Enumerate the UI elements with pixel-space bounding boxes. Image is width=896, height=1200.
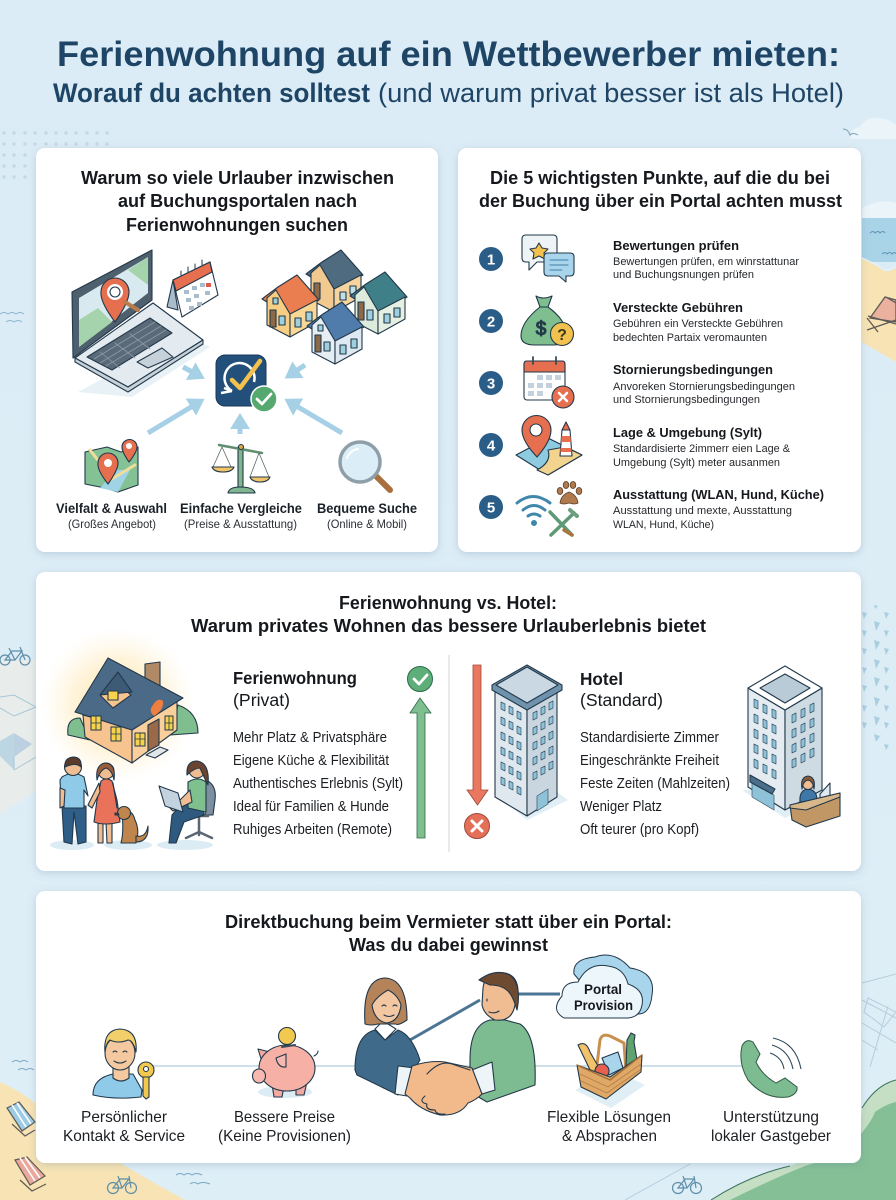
cloud: Portal Provision: [556, 955, 653, 1018]
text: Gebühren: bedechten Partaix veromaunten: [613, 332, 767, 344]
green hill bottom right: [711, 1080, 896, 1200]
icon: laptop with map: [72, 250, 210, 397]
item 4: [479, 416, 791, 475]
dot pattern top left: [2, 131, 109, 179]
icon: fork and knife: [550, 510, 577, 535]
house: orange: [262, 275, 319, 337]
label: Flexible Lösungen: [547, 1109, 671, 1145]
item 3: [479, 357, 795, 408]
Hotel list: Eingeschränkte Freiheit: [580, 753, 719, 769]
icon: money bag: [521, 296, 574, 346]
panel: Ferienwohnung vs. Hotel: [36, 572, 861, 871]
panel heading: [81, 167, 394, 235]
Hotel list: Standardisierte Zimmer: [580, 730, 719, 746]
label: Bequeme Suche: (Online & Mobil): [327, 517, 407, 531]
panel heading: Die 5 wichtigsten Punkte, auf die du bei: [490, 167, 830, 188]
panel heading: auf Buchungsportalen nach: [118, 190, 357, 211]
label: Unterstützung: Unterstützung: [723, 1109, 819, 1126]
label: Einfache Vergleiche: [180, 500, 302, 531]
label: Bequeme Suche: Bequeme Suche: [317, 500, 417, 516]
Hotel list: Weniger Platz: [580, 799, 662, 815]
text: Storno: Stornierungsbedingungen: [613, 362, 773, 377]
woman: [355, 978, 420, 1095]
item 5: [479, 482, 824, 535]
number badge 5: [479, 495, 503, 519]
panel heading: [479, 167, 842, 211]
house: teal: [350, 272, 407, 334]
Ferienwohnung list: Ferienwohnung: [233, 668, 357, 688]
icon: hotel building: [492, 665, 568, 820]
Ferienwohnung list: Mehr Platz & Privatsphäre: [233, 730, 387, 746]
icon: hotel with reception: [742, 666, 840, 827]
cloud: Portal Provision: Portal: [584, 982, 622, 997]
Hotel list: Feste Zeiten (Mahlzeiten): [580, 776, 730, 792]
panel heading: Direktbuchung beim Vermieter statt über ein Portal:: [225, 911, 672, 932]
Ferienwohnung list: Ideal für Familien & Hunde: [233, 799, 389, 815]
label: Flexible Lösungen: & Absprachen: [562, 1128, 657, 1145]
Hotel list: Oft teurer (pro Kopf): [580, 822, 699, 838]
dog: [115, 806, 148, 843]
text: Gebühren: Gebühren ein Versteckte Gebühren: [613, 318, 783, 330]
icon: money bag: $: [536, 319, 547, 340]
icon: blue deck chair: [7, 1102, 35, 1136]
Hotel list: Hotel: [580, 669, 623, 689]
label: Unterstützung: lokaler Gastgeber: [711, 1128, 832, 1145]
text: Gebühren: Versteckte Gebühren: [613, 300, 743, 315]
label: Unterstützung: [711, 1109, 832, 1145]
beach top right: [862, 218, 896, 362]
icon: paw: [557, 482, 582, 504]
icon: piggy bank: [252, 1028, 318, 1098]
label: Vielfalt und Auswahl: (Großes Angebot): [68, 517, 156, 531]
icon: central check and search badge: [216, 355, 277, 412]
arrow: red down: [467, 665, 488, 805]
panel heading: Ferienwohnung vs. Hotel:: [339, 592, 557, 613]
man: [60, 757, 88, 844]
panel heading: Warum so viele Urlauber inzwischen: [81, 167, 394, 188]
text: Bewertungen: Bewertungen prüfen, em winrstattunar: [613, 256, 799, 268]
arrows to central icon: [148, 365, 342, 434]
Ferienwohnung list: Ruhiges Arbeiten (Remote): [233, 822, 392, 838]
panel: warum Buchungsportale: [36, 148, 438, 552]
woman: [88, 763, 120, 843]
label: Persönlicher Kontakt: Persönlicher: [81, 1109, 168, 1126]
divider: [448, 655, 450, 852]
icon: green check: [408, 666, 432, 692]
cloud: Portal Provision: Provision: [574, 998, 633, 1013]
connection lines: [410, 994, 560, 1040]
icon: bicycle: [108, 1176, 136, 1194]
panel heading: Warum privates Wohnen das bessere Urlauberlebnis bietet: [191, 615, 706, 636]
icon: picnic basket: [575, 1033, 645, 1108]
label: Bequeme Suche: [317, 500, 417, 531]
Ferienwohnung list: (Privat): [233, 690, 290, 710]
text: Ausstattung: WLAN, Hund, Küche): [613, 519, 714, 531]
icon: deck chair: [867, 297, 896, 332]
text: Gebühren: [613, 300, 783, 344]
icon: phone: [741, 1038, 801, 1097]
text: Storno: und Stornierungsbedingungen: [613, 394, 760, 406]
icon: wifi: [517, 496, 550, 526]
icon: group of houses: [262, 250, 407, 364]
number badge 3: 3: [487, 376, 495, 392]
label: Vielfalt und Auswahl: [56, 500, 167, 531]
icon: location and lighthouse: [516, 416, 582, 475]
icon: handshake with two people: [355, 972, 560, 1115]
triangle pattern right: [862, 605, 889, 750]
label: Einfache Vergleiche: (Preise & Ausstattung): [184, 517, 297, 531]
text: Ausstattung: [613, 487, 824, 531]
icon: red deck chair: [15, 1157, 46, 1191]
number badge 1: 1: [487, 252, 495, 268]
Hotel list: [580, 669, 730, 838]
text: Storno: Anvoreken Stornierungsbedingungen: [613, 381, 795, 393]
number badge 2: 2: [487, 314, 495, 330]
panel heading: [191, 592, 706, 636]
icon: scales: [212, 444, 270, 493]
icon: review bubbles: [522, 235, 574, 282]
label: Bessere Preise: (Keine Provisionen): [218, 1128, 351, 1145]
icon: magnifying glass: [340, 442, 390, 490]
text: Ausstattung: Ausstattung (WLAN, Hund, Küche): [613, 487, 824, 502]
label: Persönlicher Kontakt: [63, 1109, 185, 1145]
panel heading: Ferienwohnungen suchen: [126, 214, 348, 235]
text: Bewertungen: und Buchungsnungen prüfen: [613, 269, 754, 281]
number badge 1: [479, 247, 503, 271]
left side map shapes: [0, 312, 36, 815]
illustration: woman working on laptop: [157, 761, 215, 850]
icon: calendar with cross: [524, 357, 574, 408]
panel heading: Was du dabei gewinnst: [349, 934, 548, 955]
icon: person with key: [93, 1029, 154, 1099]
label: Vielfalt und Auswahl: Vielfalt & Auswahl: [56, 500, 167, 516]
label: Bessere Preise: Bessere Preise: [234, 1109, 335, 1126]
subtitle: [53, 78, 844, 108]
man: [470, 972, 535, 1102]
icon: holiday house: [40, 627, 198, 783]
title: [53, 35, 844, 108]
house: tan: [306, 250, 363, 312]
number badge 5: 5: [487, 500, 495, 516]
connector line: [150, 1065, 750, 1067]
Ferienwohnung list: Authentisches Erlebnis (Sylt): [233, 776, 403, 792]
subtitle: (und warum privat besser ist als Hotel): [378, 78, 844, 108]
arrow: green up: [410, 698, 431, 838]
icon: map with pins: [85, 440, 138, 492]
text: Lage: Standardisierte 2immerr eien Lage &: [613, 443, 791, 455]
label: Persönlicher Kontakt: Kontakt & Service: [63, 1128, 185, 1145]
Ferienwohnung list: [233, 668, 403, 838]
reception desk with receptionist: [790, 776, 840, 827]
number badge 3: [479, 371, 503, 395]
Hotel list: (Standard): [580, 690, 663, 710]
item 2: [479, 296, 783, 346]
street map lines right: [625, 974, 896, 1200]
handshake: [395, 1062, 495, 1115]
item 1: [479, 235, 799, 282]
icon: bicycle left: [0, 647, 30, 665]
house: blue: [307, 302, 364, 364]
icon: calendar: [167, 260, 218, 317]
cloud and bird top right: [843, 118, 896, 218]
text: Ausstattung: Ausstattung und mexte, Ausstattung: [613, 505, 792, 517]
text: Storno: [613, 362, 795, 406]
icon: bicycle bottom: [672, 1176, 702, 1194]
label: Flexible Lösungen: Flexible Lösungen: [547, 1109, 671, 1126]
text: Lage: [613, 425, 791, 469]
Ferienwohnung list: Eigene Küche & Flexibilität: [233, 753, 389, 769]
panel: Direktbuchung: [36, 891, 861, 1163]
beach bottom left: [0, 1060, 210, 1200]
icon: money bag: ?: [557, 327, 567, 344]
text: Bewertungen: [613, 238, 799, 281]
text: Bewertungen: Bewertungen prüfen: [613, 238, 739, 253]
panel heading: der Buchung über ein Portal achten musst: [479, 190, 842, 211]
number badge 4: 4: [487, 438, 496, 454]
panel: die 5 wichtigsten Punkte: [458, 148, 861, 552]
illustration: couple and dog: [50, 757, 152, 850]
panel heading: [225, 911, 672, 955]
number badge 4: [479, 433, 503, 457]
text: Lage: Umgebung (Sylt) meter ausanmen: [613, 457, 780, 469]
icon: red cross: [464, 814, 490, 838]
title: Ferienwohnung auf ein Wettbewerber mieten:: [57, 35, 840, 74]
number badge 2: [479, 309, 503, 333]
waves: [176, 1174, 210, 1184]
label: Bessere Preise: [218, 1109, 351, 1145]
subtitle: Worauf du achten solltest: [53, 78, 370, 108]
label: Einfache Vergleiche: Einfache Vergleiche: [180, 500, 302, 516]
text: Lage: Lage & Umgebung (Sylt): [613, 425, 762, 440]
